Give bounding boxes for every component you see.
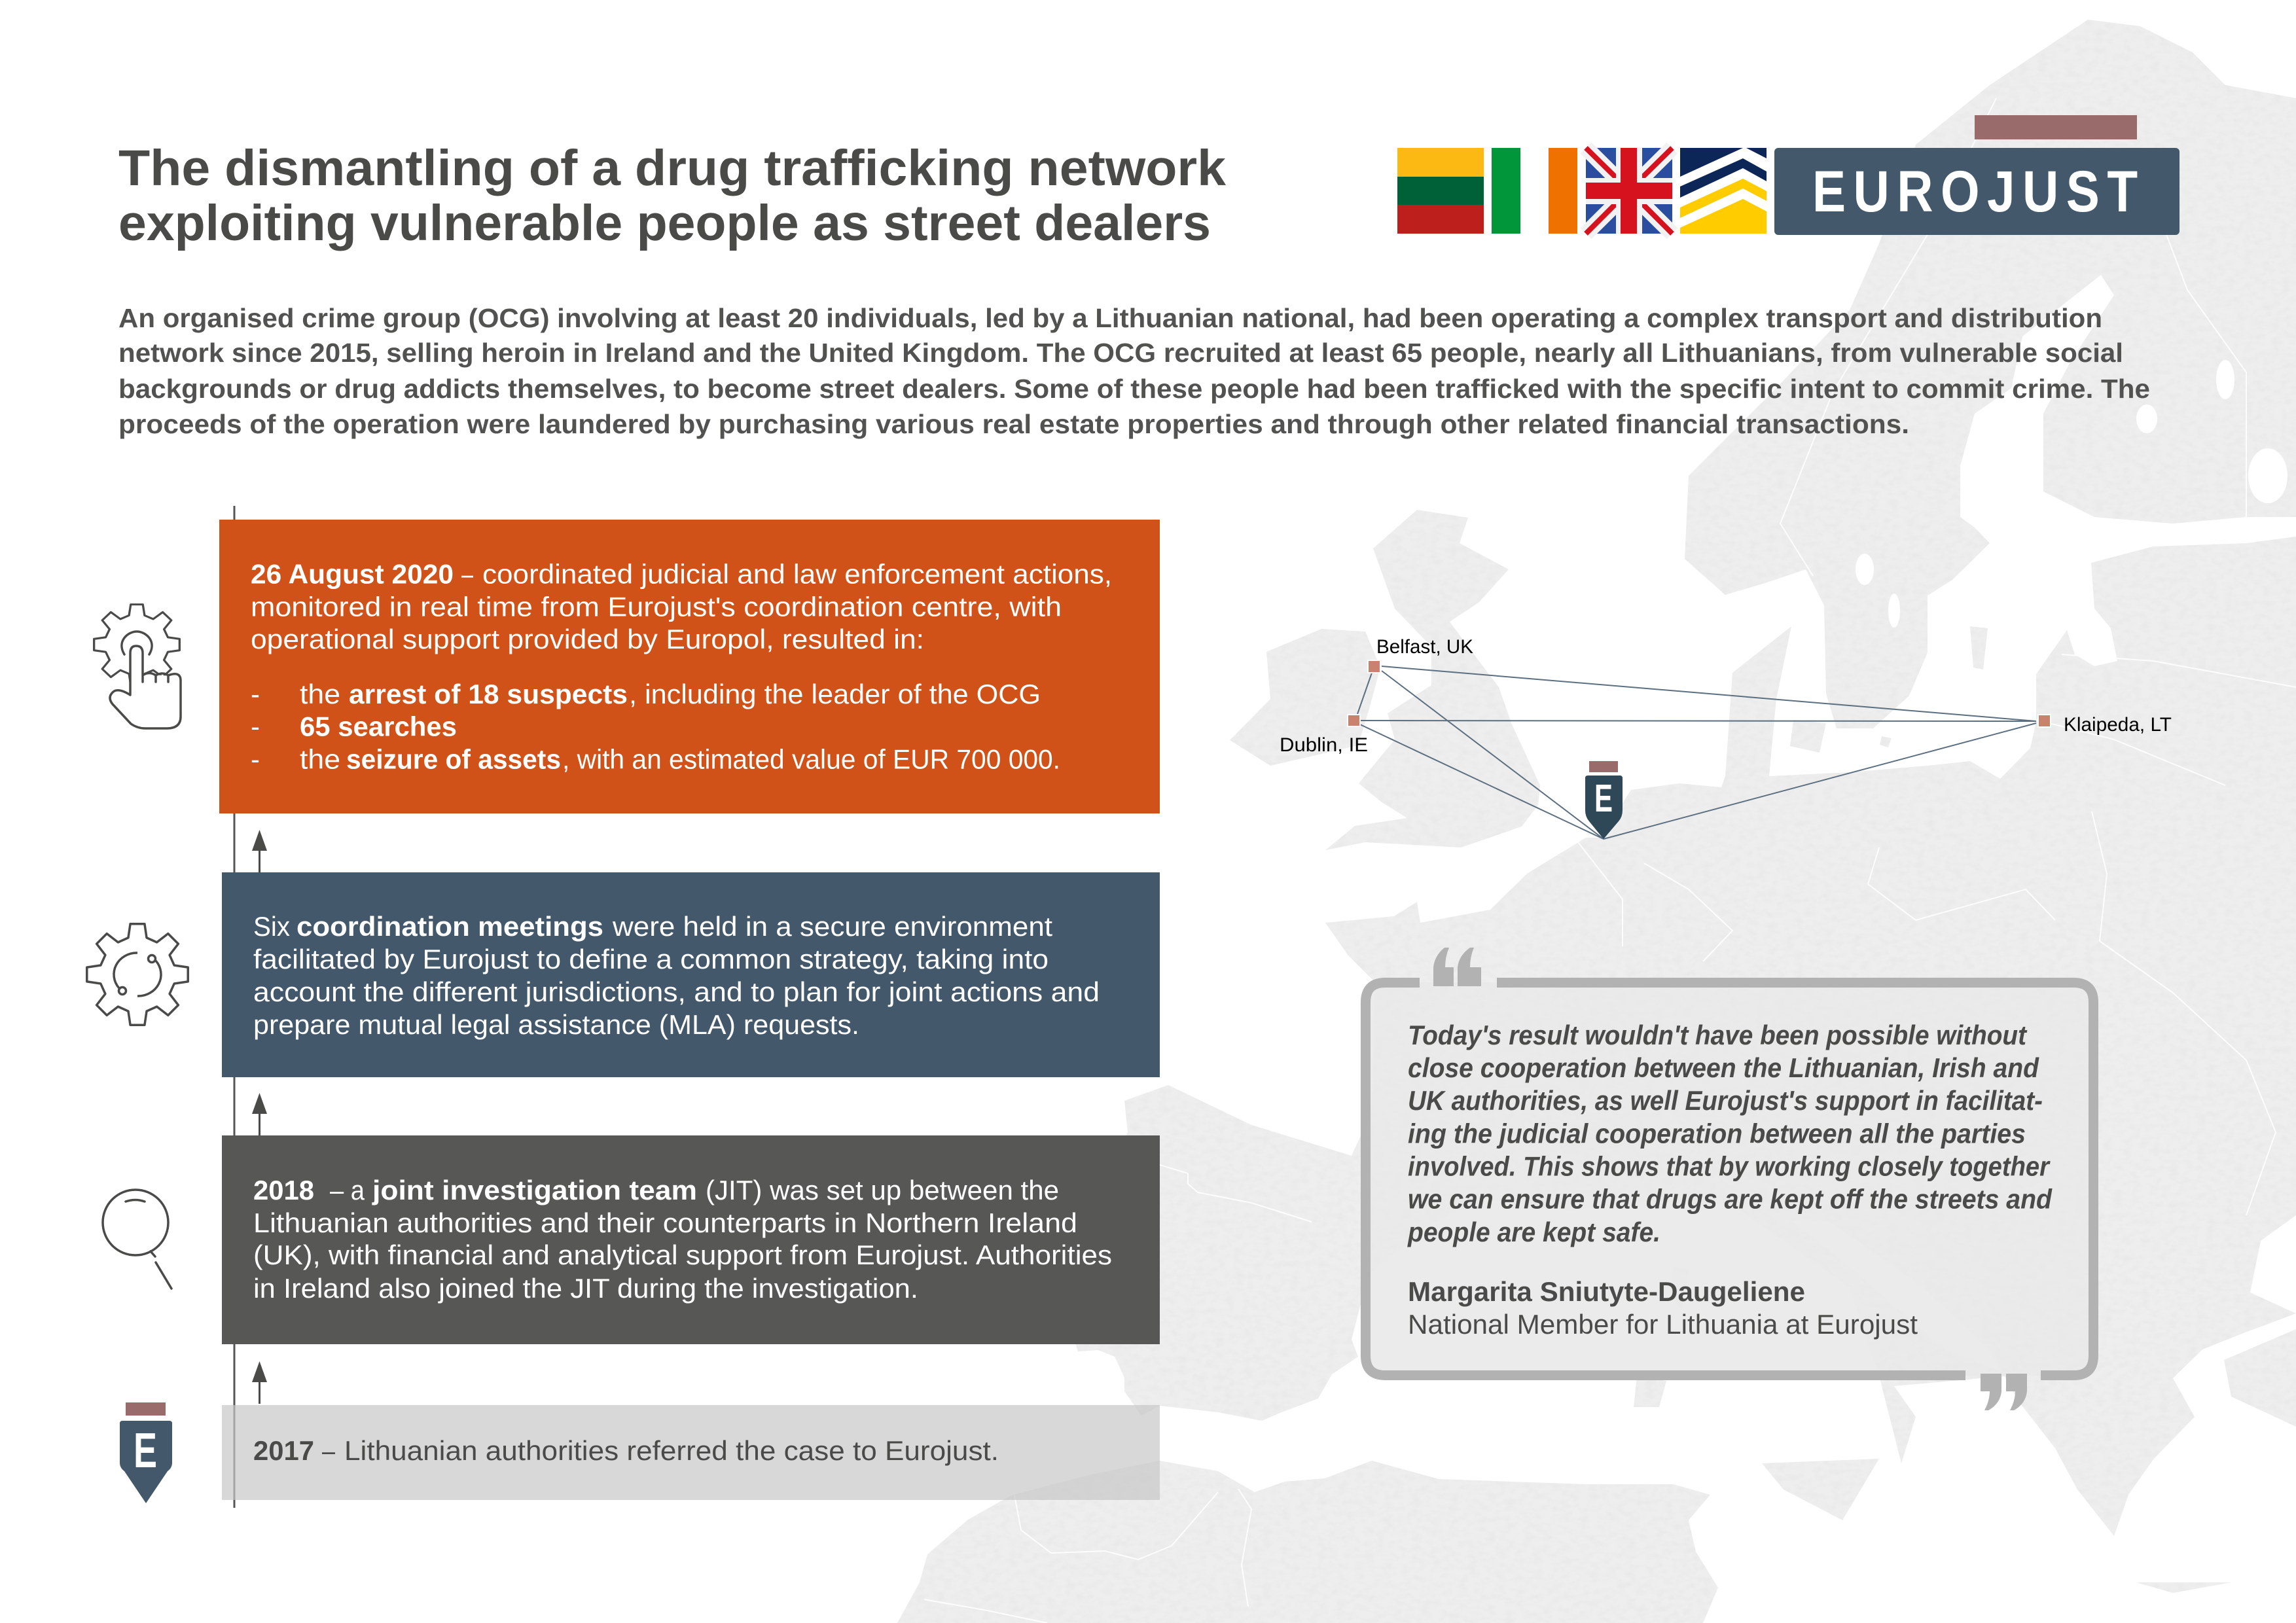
intro paragraph: backgrounds or drug addicts themselves, to become street dealers. Some of these people had been trafficked with the specific intent to commit crime. The [118,374,2150,404]
intro paragraph: network since 2015, selling heroin in Ireland and the United Kingdom. The OCG recruited at least 65 people, nearly all Lithuanians, from vulnerable social [118,338,2123,368]
intro paragraph: proceeds of the operation were laundered by purchasing various real estate properties and through other related financial transactions. [118,409,1909,439]
title [118,140,1226,251]
icon: Eurojust pin: E [134,1423,157,1478]
marker: Dublin [1280,715,1368,756]
panel: 2017 referral: 2017 [253,1435,314,1466]
panel: 26 August 2020 action day: - [251,711,260,742]
intro paragraph [118,303,2150,439]
quote text: ing the judicial cooperation between all the parties [1408,1118,2026,1149]
Eurojust banner: EUROJUST [1812,159,2138,224]
panel: coordination meetings: Six [253,911,290,942]
flag: Europol chevrons [1680,148,1767,234]
panel: 2017 referral: Lithuanian authorities referred the case to Eurojust. [344,1435,999,1466]
panel: 2018 joint investigation team: (JIT) was set up between the [706,1175,1059,1205]
quote text: Today's result wouldn't have been possible without [1408,1020,2028,1050]
marker: Belfast [1368,636,1473,673]
marker: Klaipeda: Klaipeda, LT [2064,714,2172,736]
panel: 2018 joint investigation team [222,1135,1160,1344]
icon: closing quotation mark [1981,1374,2027,1410]
quote text [1407,1020,2053,1247]
flag: United Kingdom [1586,148,1672,234]
marker: Dublin: Dublin, IE [1280,734,1368,756]
panel: coordination meetings: coordination meetings [296,911,603,942]
quote panel [1365,948,2094,1410]
flag: Lithuania [1397,148,1484,234]
panel: 2018 joint investigation team: Lithuanian authorities and their counterparts in Northern Ireland [253,1207,1077,1238]
panel: 2018 joint investigation team: – a [330,1175,365,1205]
panel: 2018 joint investigation team: 2018 [253,1175,314,1205]
icon: gear with pointing hand [94,605,181,728]
panel: 26 August 2020 action day: monitored in real time from Eurojust's coordination centre, with [251,592,1062,622]
panel: 26 August 2020 action day: coordinated judicial and law enforcement actions, [482,559,1112,589]
panel: 26 August 2020 action day: 65 searches [300,711,457,742]
panel: 26 August 2020 action day: - [251,743,260,775]
quote text: close cooperation between the Lithuanian, Irish and [1408,1052,2039,1083]
marker: Eurojust pin on map: E [1594,777,1613,820]
panel: coordination meetings: account the different jurisdictions, and to plan for joint actions and [253,976,1100,1007]
flags and Eurojust logo [1397,115,2179,235]
quote attribution: National Member for Lithuania at Eurojust [1408,1309,1918,1340]
quote text: people are kept safe. [1407,1217,1660,1247]
panel: 2018 joint investigation team: (UK), with financial and analytical support from Eurojust. Authorities [253,1240,1112,1270]
panel: 26 August 2020 action day: the [300,743,340,775]
panel: 2017 referral [222,1405,1160,1500]
panel: 26 August 2020 action day: – [461,559,473,589]
quote attribution [1408,1276,1918,1340]
panel: 26 August 2020 action day: operational support provided by Europol, resulted in: [251,624,924,654]
panel: 26 August 2020 action day: arrest of 18 suspects [349,679,628,709]
panel: 26 August 2020 action day: , including the leader of the OCG [629,679,1041,709]
timeline axis [233,506,236,1508]
panel: coordination meetings: prepare mutual legal assistance (MLA) requests. [253,1009,859,1040]
marker: Belfast: Belfast, UK [1376,636,1473,658]
arrow: meetings to action day [252,830,267,872]
panel: 2017 referral: – [322,1435,336,1466]
intro paragraph: An organised crime group (OCG) involving at least 20 individuals, led by a Lithuanian national, had been operating a complex transport and distribution [118,303,2102,333]
arrow: 2018 to meetings [252,1093,267,1135]
quote attribution: Margarita Sniutyte-Daugeliene [1408,1276,1805,1307]
panel: coordination meetings: were held in a secure environment [612,911,1052,942]
network connection lines [1357,666,2036,839]
map of Europe background [897,20,2296,1623]
arrow: 2017 to 2018 [252,1361,267,1404]
panel: coordination meetings [222,872,1160,1077]
panel: 26 August 2020 action day: , with an estimated value of EUR 700 000. [562,743,1060,775]
quote text: we can ensure that drugs are kept off the streets and [1408,1183,2053,1215]
quote text: UK authorities, as well Eurojust's support in facilitat- [1408,1085,2043,1116]
icon: gear with circular arrows [87,924,188,1025]
panel: 26 August 2020 action day: 26 August 2020 [251,559,454,589]
panel: 26 August 2020 action day: the [300,679,340,709]
panel: 26 August 2020 action day: seizure of assets [346,743,561,775]
icon: magnifying glass [103,1190,171,1289]
panel: coordination meetings: facilitated by Eurojust to define a common strategy, taking into [253,944,1049,974]
panel: 2018 joint investigation team: in Ireland also joined the JIT during the investigation. [253,1273,918,1304]
icon: opening quotation mark [1433,948,1481,986]
panel: 26 August 2020 action day: - [251,679,260,709]
panel: 26 August 2020 action day [219,520,1160,813]
title: exploiting vulnerable people as street dealers [118,195,1211,251]
flag: Ireland [1492,148,1577,234]
marker: Eurojust pin on map [1585,761,1623,839]
panel: 2018 joint investigation team: joint investigation team [372,1175,697,1205]
icon: Eurojust pin [120,1402,172,1503]
Eurojust banner [1774,115,2179,235]
title: The dismantling of a drug trafficking network [118,140,1226,196]
quote text: involved. This shows that by working closely together [1408,1150,2051,1182]
